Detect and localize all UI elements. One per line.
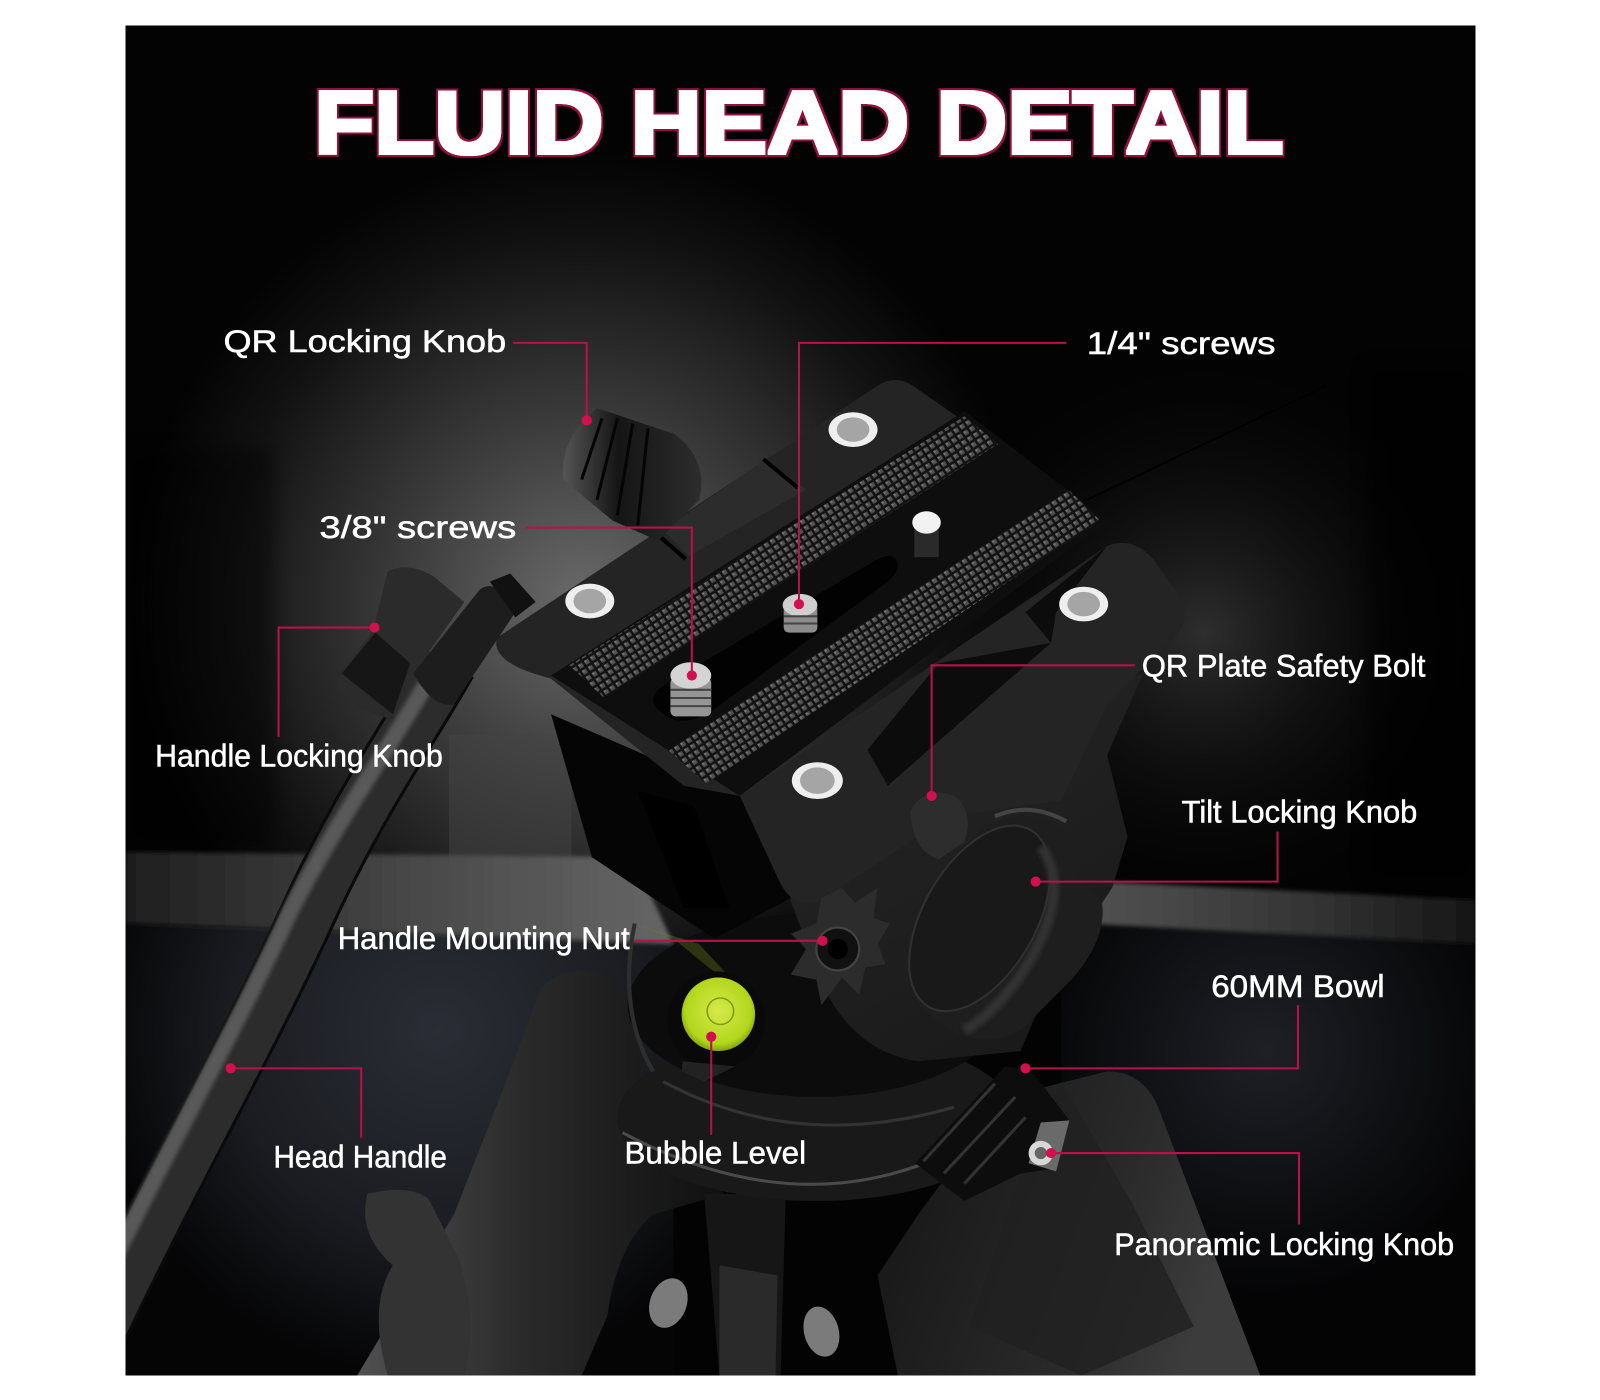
bubble level <box>682 971 756 1081</box>
handle sleeve <box>413 586 515 705</box>
3/8 inch screw <box>670 662 711 716</box>
callout: Handle Locking Knob <box>155 622 443 773</box>
QR plate safety bolt <box>910 793 968 859</box>
clamp base top <box>496 380 956 796</box>
QR locking knob <box>563 408 701 541</box>
tilt locking knob <box>908 808 1103 1034</box>
knurled strip: upper <box>569 416 998 698</box>
callout: Bubble Level <box>624 1032 806 1170</box>
callout: QR Plate Safety Bolt: QR Plate Safety Bolt <box>1142 648 1426 684</box>
bowl <box>627 923 972 1097</box>
knurled strip: lower <box>668 490 1100 784</box>
clamp side wall <box>740 543 1185 904</box>
tripod base <box>357 1061 1260 1376</box>
left tripod leg <box>357 1061 724 1376</box>
callout: QR Locking Knob <box>223 323 592 426</box>
callout: QR Plate Safety Bolt <box>927 648 1426 801</box>
bowl ring <box>622 1062 993 1201</box>
center column <box>704 1194 786 1376</box>
callout: 3/8 inch screws <box>319 509 697 681</box>
mounting slot <box>653 556 898 721</box>
callout: Head Handle: Head Handle <box>273 1138 447 1174</box>
1/4 inch screw <box>783 594 817 633</box>
plate pin <box>912 511 941 557</box>
callout: Handle Mounting Nut: Handle Mounting Nut <box>338 920 630 956</box>
callout: Panoramic Locking Knob <box>1046 1148 1454 1262</box>
handle locking knob <box>366 568 464 718</box>
head handle <box>126 568 536 1336</box>
right tripod leg <box>878 1071 1260 1376</box>
silver clamp screws <box>565 412 1108 799</box>
callout: QR Locking Knob: QR Locking Knob <box>223 323 506 359</box>
head body <box>551 673 1143 1061</box>
callout: Bubble Level: Bubble Level <box>624 1134 806 1170</box>
handle mounting nut <box>791 888 890 1005</box>
leg lock knob <box>365 1190 450 1376</box>
callout: Handle Mounting Nut <box>340 926 828 956</box>
callout: Panoramic Locking Knob: Panoramic Locking Knob <box>1114 1226 1454 1262</box>
callout: Head Handle <box>226 1063 447 1174</box>
leg bolts <box>649 1278 688 1328</box>
callout: 3/8 inch screws: 3/8" screws <box>319 509 516 545</box>
callout: Handle Locking Knob: Handle Locking Knob <box>155 737 443 773</box>
callout: 60MM Bowl: 60MM Bowl <box>1211 968 1385 1004</box>
callout: 1/4 inch screws: 1/4" screws <box>1087 325 1276 361</box>
callout: Tilt Locking Knob: Tilt Locking Knob <box>1182 793 1417 829</box>
callout: 60MM Bowl <box>1020 968 1385 1073</box>
callout: 1/4 inch screws <box>794 325 1276 609</box>
title: FLUID HEAD DETAIL <box>314 74 1284 172</box>
QR plate <box>551 411 1107 796</box>
callout: Tilt Locking Knob <box>1031 793 1417 887</box>
panoramic locking knob <box>915 1066 1069 1201</box>
